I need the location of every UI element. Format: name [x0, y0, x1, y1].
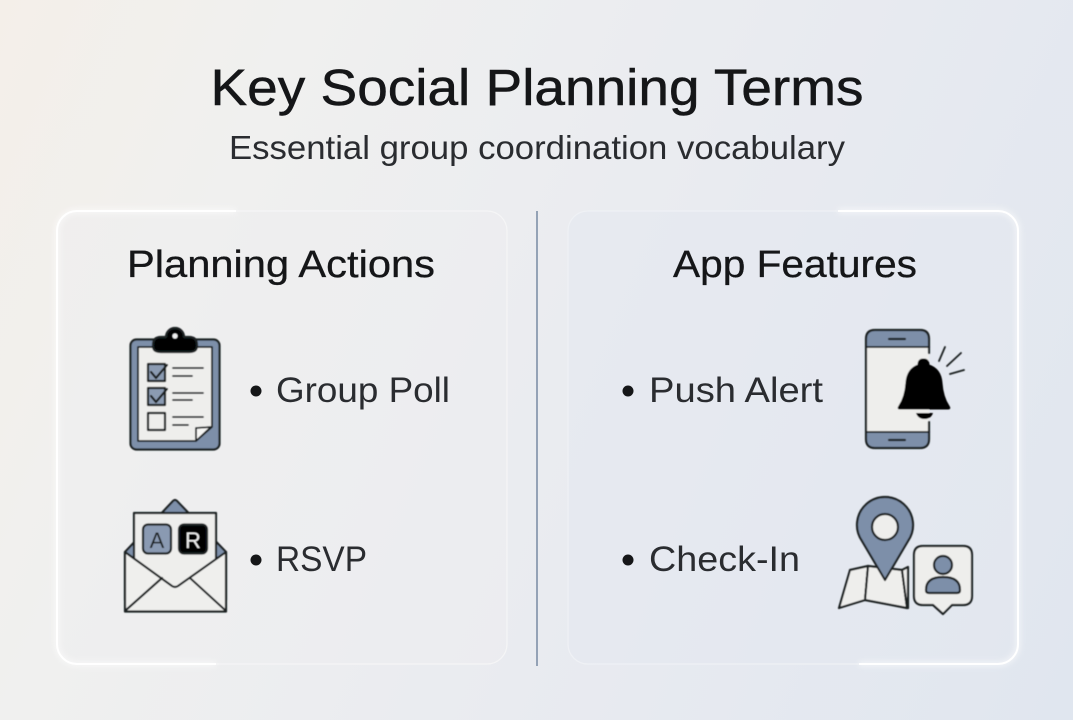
label: push alert: Push Alert — [649, 371, 823, 410]
icon: clipboard checklist — [130, 328, 220, 450]
icon: map pin and user bubble — [839, 497, 972, 614]
icon: phone with bell — [866, 330, 964, 448]
label: group poll: Group Poll — [276, 371, 450, 410]
label: rsvp: RSVP — [276, 540, 367, 579]
title: Key Social Planning Terms — [210, 59, 864, 116]
icon: envelope rsvp: A — [150, 528, 165, 553]
panel: app features — [568, 211, 1018, 664]
subtitle: Essential group coordination vocabulary — [229, 129, 846, 166]
center divider — [536, 211, 538, 666]
icon: envelope rsvp — [125, 500, 226, 612]
heading: planning actions: Planning Actions — [127, 244, 435, 286]
label: check-in: Check-In — [649, 540, 800, 579]
panel: planning actions — [57, 211, 507, 664]
icon: envelope rsvp: R — [185, 528, 201, 553]
heading: app features: App Features — [673, 244, 917, 286]
